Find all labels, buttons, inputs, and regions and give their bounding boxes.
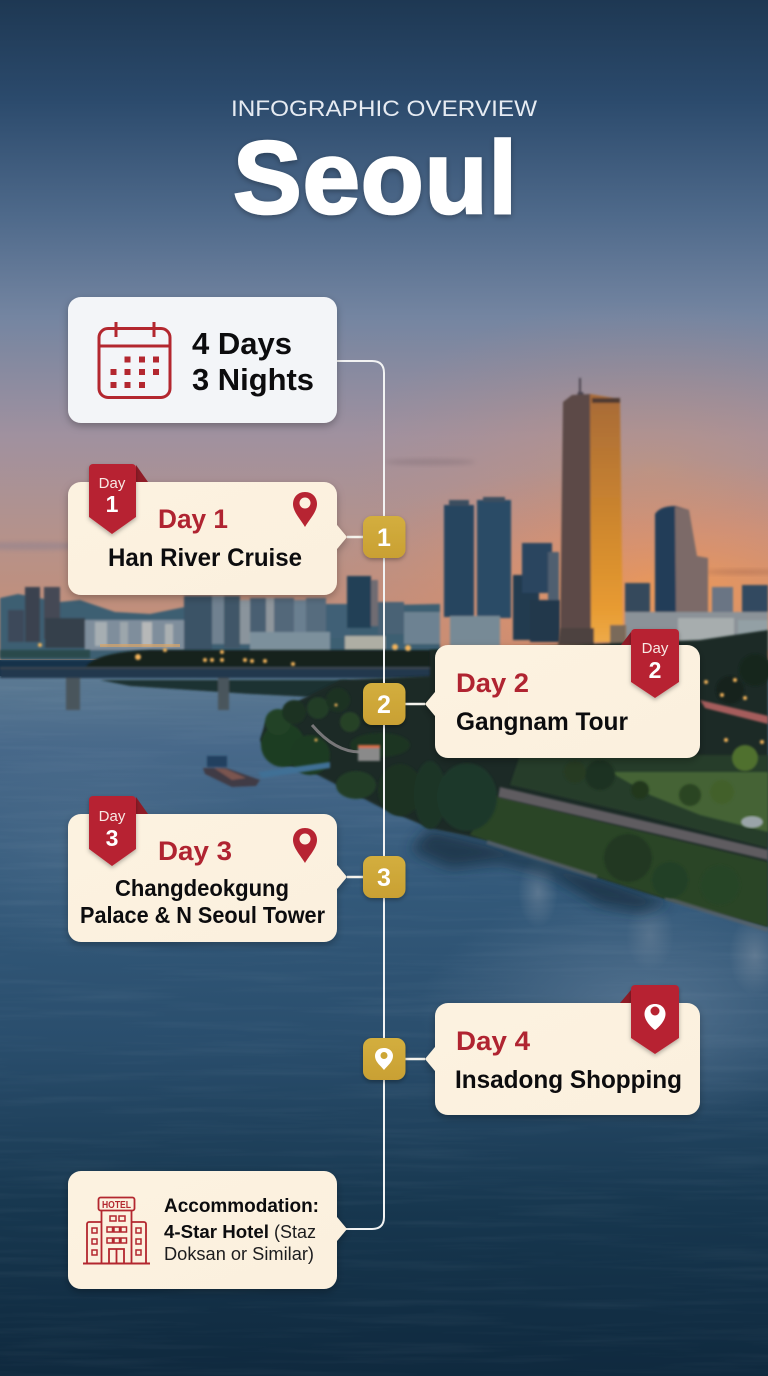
panel: trip duration — [68, 297, 337, 423]
accommodation text: 4-Star Hotel — [164, 1222, 269, 1242]
background: riverbank park — [38, 630, 768, 930]
day 2 activity: Gangnam Tour — [456, 708, 628, 736]
panel: day 2 — [425, 629, 700, 758]
marker: step 3: 3 — [377, 864, 391, 892]
day 4 activity: Insadong Shopping — [455, 1066, 682, 1094]
ribbon: day 2: 2 — [649, 657, 661, 683]
marker: step 2: 2 — [377, 691, 391, 719]
duration text — [192, 326, 314, 397]
ribbon: day 1: Day — [99, 475, 126, 492]
background: city skyline — [0, 497, 768, 660]
day 2 heading: Day 2 — [456, 668, 529, 698]
background: sunset sky — [0, 0, 768, 720]
accommodation text: (Staz — [274, 1222, 316, 1242]
day 4 heading: Day 4 — [456, 1026, 530, 1056]
day 1 heading: Day 1 — [158, 504, 228, 534]
panel: day 1 — [68, 464, 347, 595]
day 3 heading: Day 3 — [158, 836, 232, 866]
day 3 activity: Palace & N Seoul Tower — [80, 902, 325, 928]
marker: step 1: 1 — [377, 524, 391, 552]
ribbon: day 3 — [89, 796, 148, 866]
day 1 activity: Han River Cruise — [108, 544, 302, 572]
duration text: 3 Nights — [192, 362, 314, 397]
timeline connector line — [337, 361, 425, 1229]
panel: day 4 — [425, 985, 700, 1115]
marker: step 2 — [363, 683, 406, 725]
ribbon: day 3: Day — [99, 808, 126, 825]
ribbon: day 1 — [89, 464, 148, 534]
background: golden skyscraper — [558, 378, 626, 650]
panel: accommodation — [68, 1171, 347, 1289]
ribbon: day 2 — [621, 629, 679, 698]
icon: map pin — [293, 492, 317, 527]
marker: step 1 — [363, 516, 406, 558]
duration text: 4 Days — [192, 326, 292, 361]
background: river water — [0, 676, 768, 1376]
day 3 activity — [80, 875, 325, 928]
marker: step 4 pin — [363, 1038, 406, 1080]
ribbon: day 4 — [620, 985, 679, 1054]
panel: day 3 — [68, 796, 347, 942]
accommodation text — [164, 1196, 319, 1264]
background: ferry dock — [203, 745, 380, 787]
accommodation text: Accommodation: — [164, 1196, 319, 1217]
main title: Seoul — [233, 120, 517, 235]
accommodation text: Doksan or Similar) — [164, 1244, 314, 1264]
ribbon: day 1: 1 — [106, 491, 119, 517]
ribbon: day 2: Day — [642, 640, 669, 657]
icon: hotel: HOTEL — [102, 1200, 131, 1211]
day 3 activity: Changdeokgung — [115, 875, 289, 901]
icon: map pin — [293, 828, 317, 863]
background: far bank and bridge — [0, 650, 440, 710]
eyebrow heading: INFOGRAPHIC OVERVIEW — [231, 96, 538, 121]
icon: calendar — [99, 322, 170, 398]
marker: step 3 — [363, 856, 406, 898]
ribbon: day 3: 3 — [106, 825, 118, 851]
icon: hotel — [83, 1198, 150, 1264]
